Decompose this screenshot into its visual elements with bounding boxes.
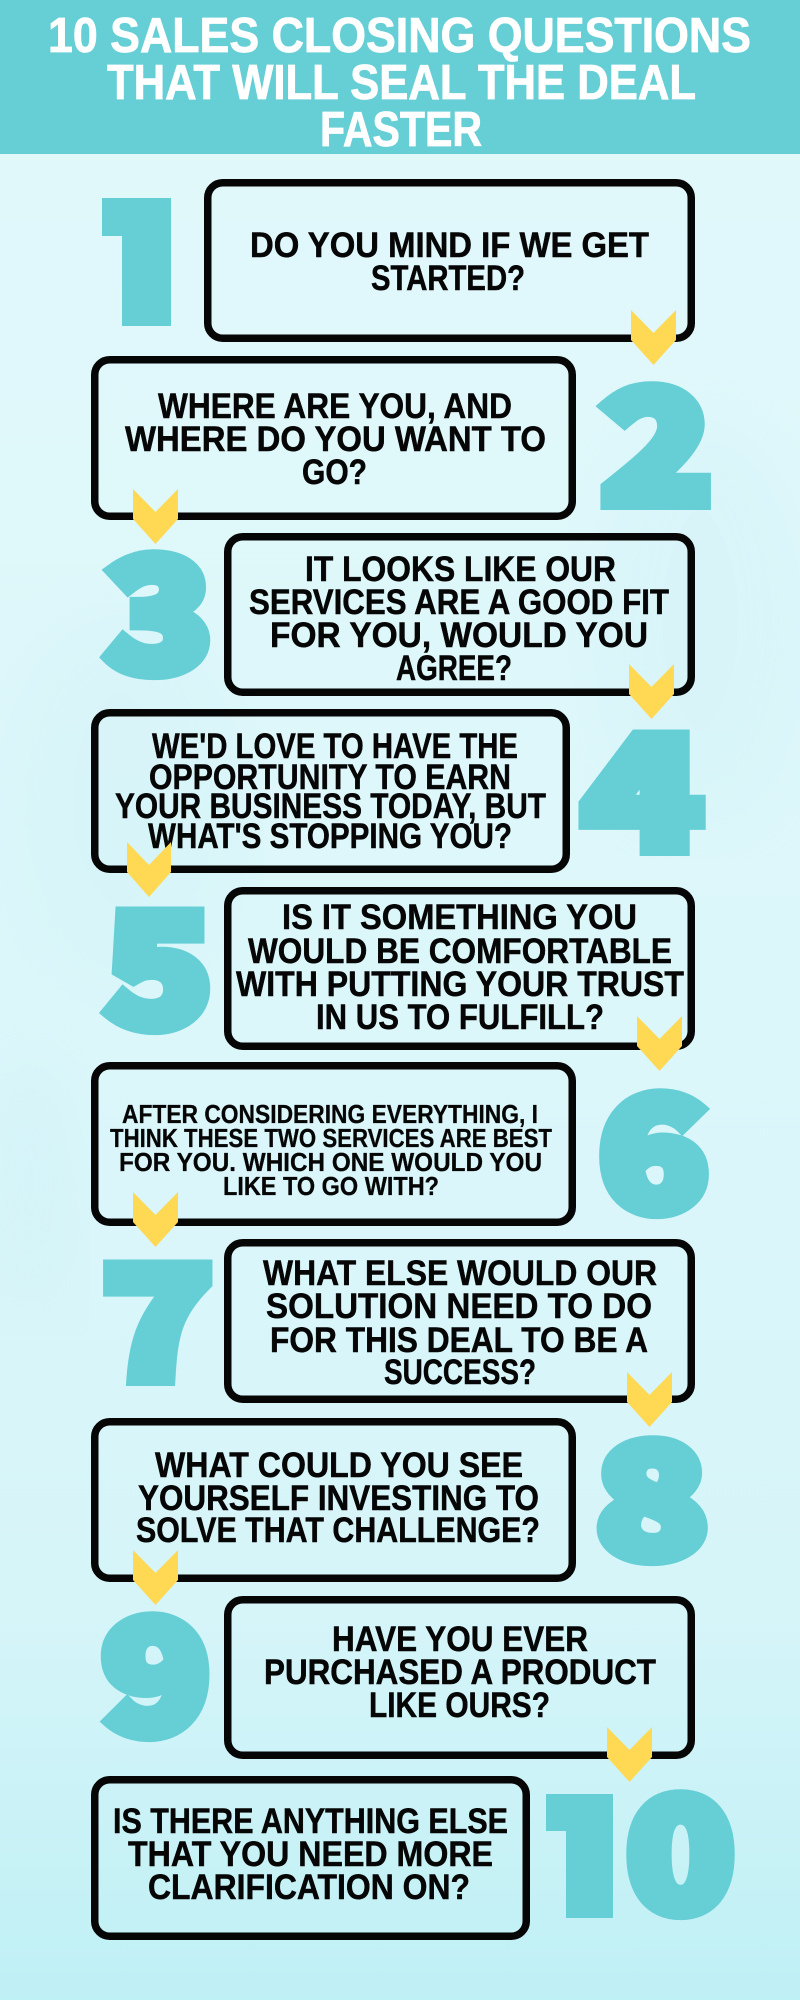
question 4 box: [95, 713, 566, 869]
question 7 box: SUCCESS?: [384, 1353, 536, 1392]
question 1 box: DO YOU MIND IF WE GET: [250, 226, 649, 265]
question 2 box: [95, 360, 572, 516]
arrow 6 to 7: [133, 1192, 178, 1247]
question 5 box: IN US TO FULFILL?: [316, 998, 604, 1037]
question 7 box: SOLUTION NEED TO DO: [266, 1287, 652, 1326]
arrow 9 to 10: [607, 1727, 652, 1782]
question 10 box: [95, 1780, 526, 1936]
number 8: 8: [596, 1377, 708, 1602]
question 2 box: WHERE ARE YOU, AND: [158, 387, 512, 426]
question 3 box: [228, 537, 691, 692]
question 10 box: THAT YOU NEED MORE: [128, 1835, 493, 1874]
question 8 box: [95, 1422, 572, 1578]
arrow 2 to 3: [133, 489, 178, 544]
number 4: 4: [583, 669, 702, 894]
question 6 box: LIKE TO GO WITH?: [223, 1171, 439, 1201]
question 4 box: YOUR BUSINESS TODAY, BUT: [115, 787, 546, 826]
question 6 box: THINK THESE TWO SERVICES ARE BEST: [110, 1123, 552, 1153]
question 1 box: [208, 183, 691, 338]
question 2 box: WHERE DO YOU WANT TO: [125, 420, 546, 459]
number 9: 9: [102, 1553, 210, 1778]
title banner: THAT WILL SEAL THE DEAL: [107, 56, 696, 110]
number 6: 6: [599, 1030, 708, 1255]
question 5 box: WITH PUTTING YOUR TRUST: [236, 965, 684, 1004]
question 3 box: SERVICES ARE A GOOD FIT: [249, 583, 669, 622]
number 2: 2: [601, 323, 712, 548]
question 2 box: GO?: [302, 453, 367, 492]
question 5 box: WOULD BE COMFORTABLE: [248, 932, 672, 971]
number 7: 7: [102, 1199, 213, 1424]
question 4 box: OPPORTUNITY TO EARN: [149, 758, 511, 797]
question 8 box: SOLVE THAT CHALLENGE?: [136, 1511, 540, 1550]
number 1: 1: [88, 139, 182, 364]
question 7 box: FOR THIS DEAL TO BE A: [270, 1321, 648, 1360]
question 10 box: CLARIFICATION ON?: [148, 1868, 470, 1907]
arrow 1 to 2: [631, 310, 676, 365]
question 8 box: WHAT COULD YOU SEE: [155, 1446, 523, 1485]
question 10 box: IS THERE ANYTHING ELSE: [113, 1802, 508, 1841]
question 9 box: PURCHASED A PRODUCT: [264, 1653, 656, 1692]
arrow 8 to 9: [133, 1550, 178, 1605]
question 7 box: [228, 1243, 691, 1399]
number 10: [546, 1789, 735, 1920]
question 4 box: WHAT'S STOPPING YOU?: [148, 817, 512, 856]
question 3 box: AGREE?: [396, 649, 512, 688]
question 6 box: FOR YOU. WHICH ONE WOULD YOU: [119, 1147, 542, 1177]
number 10: 1: [533, 1731, 627, 1956]
title banner: [0, 0, 800, 157]
question 5 box: [228, 891, 691, 1046]
question 9 box: HAVE YOU EVER: [332, 1620, 588, 1659]
title banner: FASTER: [320, 103, 482, 157]
question 8 box: YOURSELF INVESTING TO: [138, 1479, 539, 1518]
question 7 box: WHAT ELSE WOULD OUR: [263, 1254, 657, 1293]
title banner: 10 SALES CLOSING QUESTIONS: [48, 9, 751, 63]
arrow 7 to 8: [627, 1372, 672, 1427]
question 3 box: IT LOOKS LIKE OUR: [305, 550, 616, 589]
question 3 box: FOR YOU, WOULD YOU: [270, 616, 648, 655]
question 1 box: STARTED?: [371, 259, 525, 298]
arrow 3 to 4: [629, 664, 674, 719]
question 4 box: WE'D LOVE TO HAVE THE: [152, 727, 518, 766]
question 9 box: LIKE OURS?: [369, 1686, 550, 1725]
question 5 box: IS IT SOMETHING YOU: [282, 898, 637, 937]
question 6 box: AFTER CONSIDERING EVERYTHING, I: [122, 1099, 538, 1129]
number 5: 5: [105, 846, 212, 1071]
number 3: 3: [105, 491, 212, 716]
number 10: 0: [627, 1731, 734, 1956]
question 9 box: [228, 1600, 691, 1755]
arrow 4 to 5: [127, 842, 171, 897]
arrow 5 to 6: [637, 1016, 682, 1071]
question 6 box: [95, 1066, 572, 1222]
